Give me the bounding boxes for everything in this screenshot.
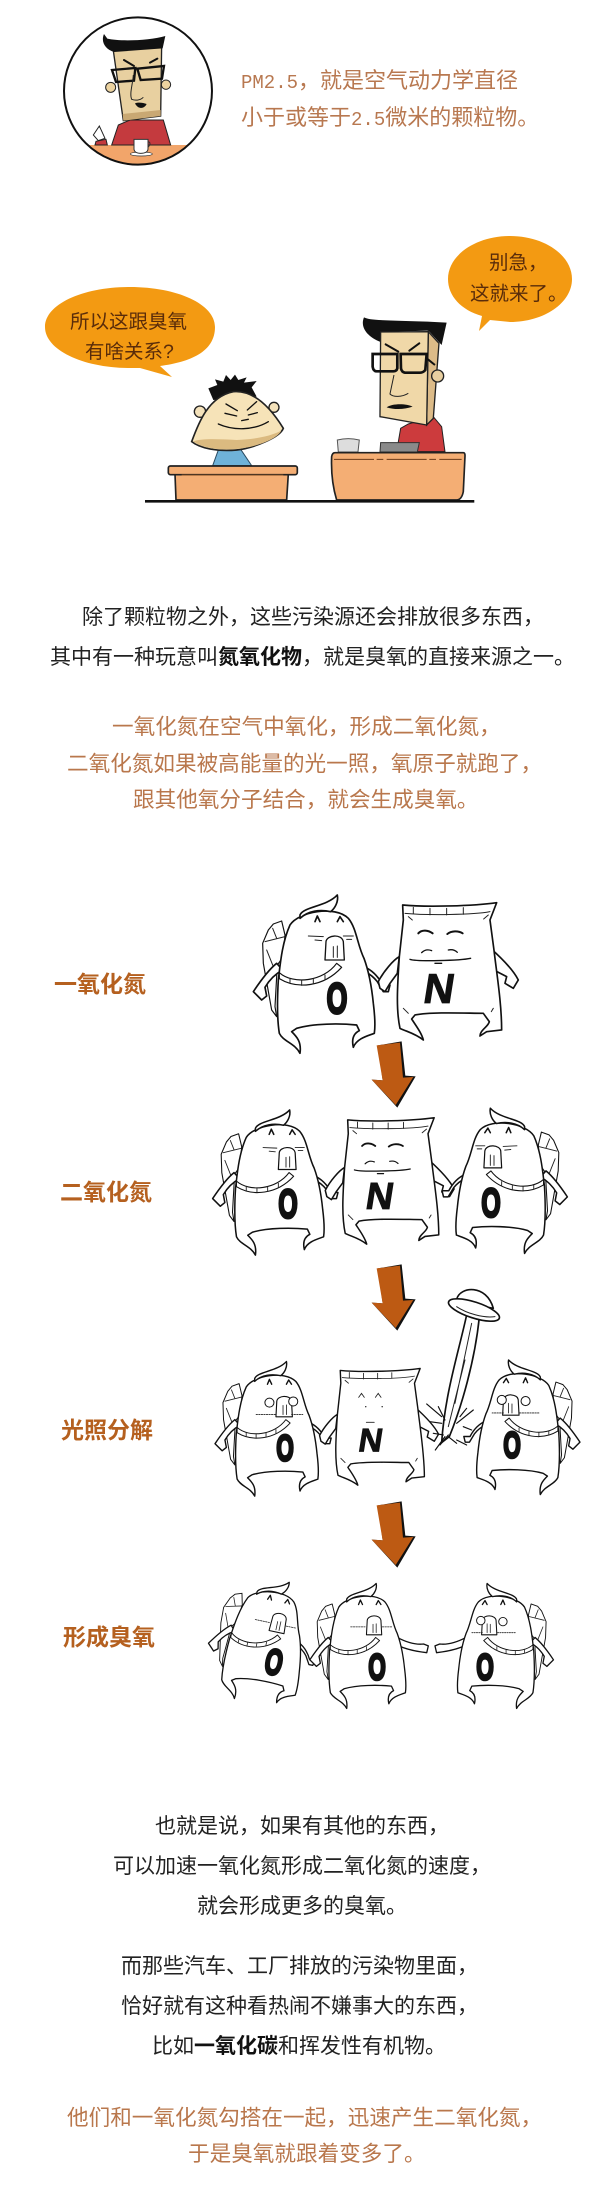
speech bubble: right answer: [448, 236, 572, 331]
presenter character: [337, 317, 447, 452]
label: nitrogen dioxide: 二氧化氮: [60, 1179, 152, 1205]
letter O left: O: [276, 1429, 294, 1469]
illustration: nitric oxide O + N: [253, 895, 518, 1053]
character: N: [378, 903, 518, 1040]
text block: conclusion: 他们和一氧化氮勾搭在一起，迅速产生二氧化氮，: [67, 2105, 542, 2130]
arrow: step three to four: [372, 1501, 416, 1568]
speech bubble: right answer: 这就来了。: [470, 283, 568, 305]
text block: formation explanation: [67, 714, 542, 812]
left desk: [168, 466, 297, 500]
speech bubble: right answer: 别急，: [489, 252, 548, 274]
kid character: [192, 375, 283, 466]
text block: nitrogen oxides: [50, 606, 575, 669]
text block: conclusion: [67, 2105, 542, 2166]
icon: presenter portrait in circle: [63, 17, 213, 168]
speech bubble: left question: [45, 287, 215, 377]
text block: nitrogen oxides: 其中有一种玩意叫氮氧化物，就是臭氧的直接来源之一。: [50, 646, 575, 669]
character: right O: [442, 1108, 567, 1253]
speech bubble: left question: 所以这跟臭氧: [70, 311, 187, 333]
text block: faster conversion: 可以加速一氧化氮形成二氧化氮的速度，: [113, 1855, 491, 1878]
character: O: [253, 895, 390, 1053]
arrow: step one to two: [372, 1041, 416, 1108]
intro text: definition of PM2.5: 小于或等于2.5微米的颗粒物。: [241, 106, 539, 132]
character: N: [320, 1368, 439, 1485]
right desk: [332, 453, 465, 500]
speech bubble: left question: 有啥关系?: [85, 341, 174, 363]
ground line: [145, 497, 474, 505]
text block: conclusion: 于是臭氧就跟着变多了。: [188, 2141, 426, 2166]
character: left O: [215, 1362, 331, 1496]
text block: pollutants: 恰好就有这种看热闹不嫌事大的东西，: [121, 1995, 478, 2018]
character: right O: [464, 1360, 580, 1495]
character: tilted left O: [198, 1569, 330, 1713]
icon: ufo with light beam: [427, 1290, 502, 1450]
text block: pollutants: [121, 1955, 478, 2058]
text block: pollutants: 而那些汽车、工厂排放的污染物里面，: [121, 1955, 478, 1978]
letter N: N: [420, 965, 458, 1012]
text block: nitrogen oxides: 除了颗粒物之外，这些污染源还会排放很多东西，: [82, 606, 544, 629]
character: left O: [213, 1110, 338, 1255]
illustration: nitrogen dioxide O N O: [213, 1108, 567, 1255]
illustration: ozone O O O: [198, 1569, 553, 1713]
letter O left: O: [278, 1183, 298, 1227]
label: ozone formed: 形成臭氧: [63, 1624, 155, 1650]
text block: faster conversion: 也就是说，如果有其他的东西，: [155, 1815, 449, 1838]
text block: formation explanation: 一氧化氮在空气中氧化，形成二氧化氮，: [112, 714, 501, 739]
letter N: N: [363, 1175, 397, 1218]
text block: pollutants: 比如一氧化碳和挥发性有机物。: [152, 2035, 446, 2058]
letter O right: O: [476, 1648, 494, 1688]
letter O right: O: [481, 1182, 501, 1226]
character: right O: [435, 1583, 553, 1709]
letter O right: O: [503, 1426, 521, 1466]
text block: formation explanation: 跟其他氧分子结合，就会生成臭氧。: [133, 787, 479, 812]
letter O: O: [327, 975, 347, 1023]
letter O middle: O: [368, 1648, 386, 1688]
intro text: definition of PM2.5: PM2.5，就是空气动力学直径: [241, 69, 518, 95]
character: middle O: [310, 1583, 428, 1709]
scene: kid and presenter at desks: [145, 317, 474, 501]
text block: faster conversion: 就会形成更多的臭氧。: [197, 1895, 407, 1918]
label: nitric oxide: 一氧化氮: [54, 971, 146, 997]
intro text: definition of PM2.5: [241, 69, 539, 132]
letter O left: O: [261, 1642, 286, 1684]
character: N: [325, 1118, 454, 1244]
text block: faster conversion: [113, 1815, 491, 1918]
text block: formation explanation: 二氧化氮如果被高能量的光一照，氧原子就跑了，: [67, 751, 542, 776]
letter N: N: [356, 1423, 385, 1459]
label: photolysis: 光照分解: [61, 1417, 153, 1443]
illustration: photolysis with beam: [215, 1290, 580, 1496]
arrow: step two to three: [372, 1264, 416, 1331]
